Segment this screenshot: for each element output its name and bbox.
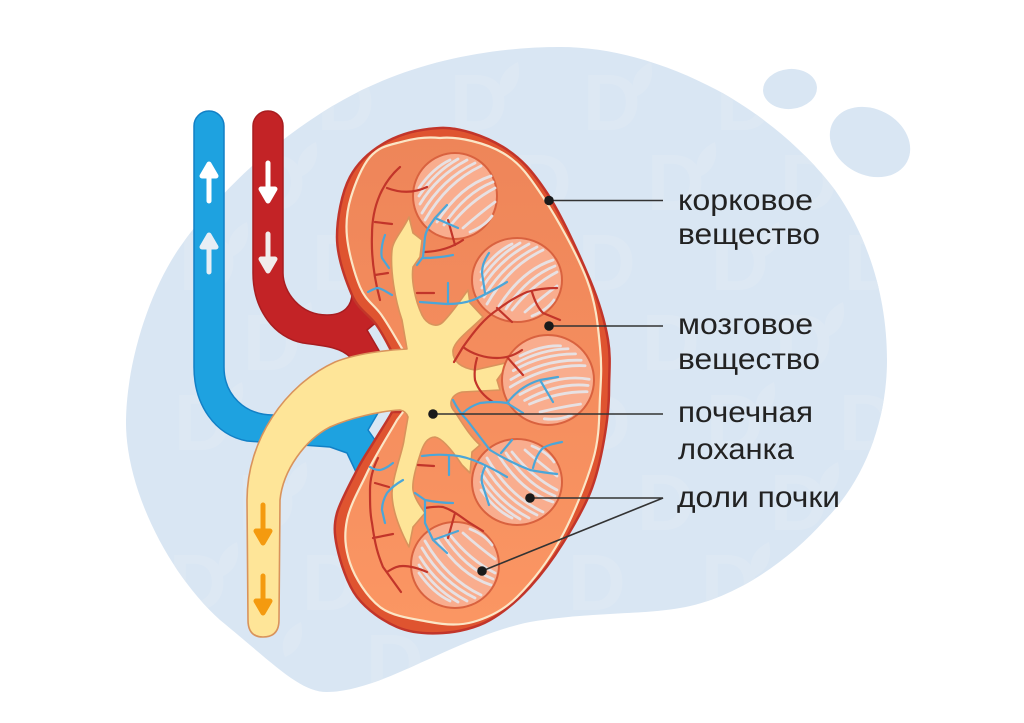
watermark pattern: DDDD	[317, 58, 774, 147]
watermark pattern: DDDDD	[248, 138, 838, 227]
callout: почечная лоханка: лоханка	[678, 433, 794, 466]
renal vein (blue tube)	[194, 111, 378, 472]
small blob top	[761, 67, 819, 111]
watermark pattern: DDDDDD	[179, 218, 902, 307]
callout: корковое вещество: вещество	[678, 218, 820, 251]
callout: мозговое вещество: мозговое	[678, 308, 813, 341]
watermark pattern: DDDDD	[238, 458, 828, 547]
watermark pattern: DDDDD	[169, 538, 759, 627]
lobe 5	[411, 522, 499, 608]
lobe 3	[499, 330, 601, 431]
callout: доли почки: доли почки	[677, 481, 840, 514]
arrow: vein up 2	[202, 235, 216, 272]
arrow: ureter down 2	[256, 576, 270, 613]
veins (blue branches)	[368, 205, 562, 553]
arrow: artery down 2	[261, 234, 275, 271]
callout: почечная лоханка: почечная	[678, 396, 813, 429]
lobe 2	[472, 238, 562, 322]
arrow: artery down 1	[261, 163, 275, 201]
watermark pattern: DDDDDD	[174, 378, 897, 467]
medulla	[345, 137, 601, 625]
cortex outer layer	[335, 128, 610, 633]
kidney	[247, 128, 610, 637]
callout: корковое вещество: корковое	[678, 184, 813, 217]
small blob right	[817, 93, 923, 191]
callout: почечная лоханка	[428, 396, 813, 466]
lobe 1	[413, 153, 497, 239]
renal pelvis and ureter	[247, 217, 510, 637]
arrow: vein up 1	[202, 164, 216, 201]
lobe 4	[472, 439, 562, 525]
background blob	[126, 47, 887, 692]
callout: мозговое вещество: вещество	[678, 343, 820, 376]
callout: доли почки	[477, 481, 840, 576]
watermark pattern	[169, 58, 902, 707]
callout: мозговое вещество	[544, 308, 820, 376]
renal artery (red tube)	[253, 111, 385, 357]
arrow: ureter down 1	[256, 505, 270, 543]
arteries (red branches)	[370, 167, 560, 592]
callout: корковое вещество	[544, 184, 820, 251]
watermark pattern: DDDDD	[243, 298, 833, 387]
watermark pattern: DD	[366, 618, 557, 707]
